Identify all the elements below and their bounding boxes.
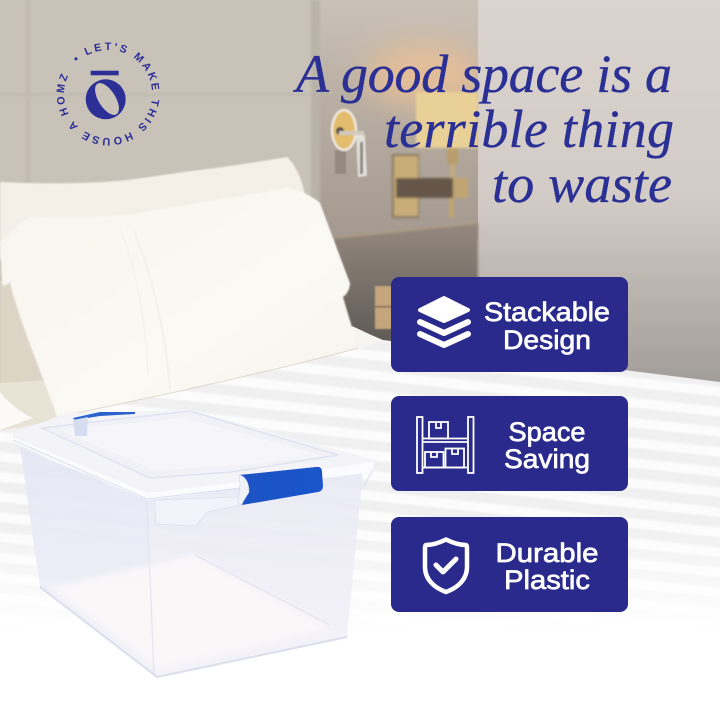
headline: terrible thing (384, 99, 674, 159)
box right side (147, 470, 363, 677)
label (496, 538, 598, 595)
box handle recess (154, 497, 240, 526)
feature button: stackable design (391, 277, 628, 372)
box back clip (73, 412, 135, 420)
feature button: durable plastic (391, 517, 628, 612)
icon: warehouse shelf with boxes (417, 417, 474, 473)
label: Durable (496, 538, 598, 568)
headline: to waste (492, 154, 672, 214)
label: Space (508, 417, 586, 447)
logo circular slogan (64, 50, 152, 138)
box floor (48, 555, 330, 668)
pillows (0, 157, 382, 430)
logo bar (91, 71, 119, 75)
logo letter O (86, 79, 126, 119)
box lid (13, 410, 375, 500)
bedside table (333, 223, 478, 345)
beige underside sheets (0, 280, 60, 430)
door handle with tassel (332, 110, 367, 177)
lamp shade (416, 92, 478, 148)
logo badge: • LET'S MAKE THIS HOUSE A HOMZ (56, 42, 160, 146)
icon: shield with check (425, 540, 467, 592)
label (484, 297, 610, 355)
label: Plastic (504, 565, 590, 595)
label (504, 417, 590, 474)
headline: A good space is a (293, 44, 672, 104)
back pillow (0, 157, 305, 260)
pillow tip (352, 326, 382, 349)
label: Saving (504, 444, 590, 474)
wall lamp (392, 92, 478, 218)
box front clip (239, 467, 323, 505)
plastic storage box (13, 410, 375, 677)
right wall (478, 0, 720, 400)
background: blurred bedroom wall (0, 0, 720, 400)
lamp wall plate (392, 154, 419, 218)
box left side (20, 447, 157, 677)
headline (293, 44, 674, 214)
upholstered headboard panels (0, 0, 485, 240)
lamp stem (447, 148, 458, 164)
icon: stacked layers (420, 298, 468, 345)
label: Design (503, 325, 591, 355)
wall sockets (375, 286, 393, 329)
bed with striped sheet (0, 326, 720, 720)
label: Stackable (484, 297, 610, 327)
feature button: space saving (391, 396, 628, 491)
front pillow (0, 188, 358, 417)
